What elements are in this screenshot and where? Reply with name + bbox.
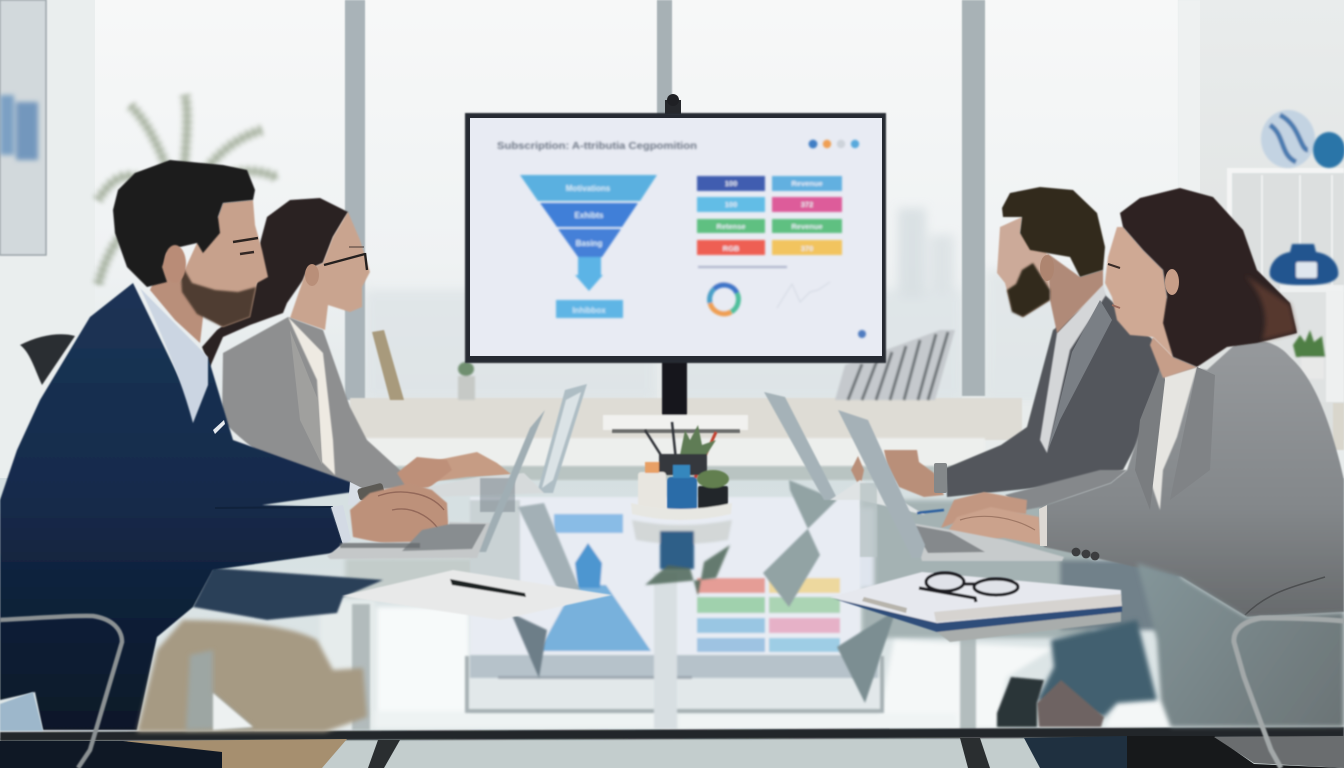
right hand xyxy=(428,452,512,482)
ear xyxy=(1165,269,1179,295)
jacket xyxy=(222,317,412,490)
table front rail xyxy=(0,727,1344,741)
hair highlight xyxy=(1245,275,1296,340)
status dots xyxy=(809,140,859,148)
reflected laptop screens xyxy=(511,480,896,703)
shirt xyxy=(140,288,208,423)
lapel shade xyxy=(1135,362,1165,510)
hands xyxy=(884,450,944,497)
segment grid: Revenue xyxy=(791,179,823,188)
laptop base xyxy=(911,523,1064,561)
centre desk organiser xyxy=(631,422,732,596)
left hand xyxy=(397,457,452,490)
jacket xyxy=(946,293,1167,497)
beard xyxy=(180,262,256,327)
windows xyxy=(95,0,1178,400)
clip xyxy=(862,597,907,613)
water glass right xyxy=(860,483,877,557)
segment grid: Revenue xyxy=(791,222,823,231)
pens and plant in cup xyxy=(645,422,716,478)
window sill and books xyxy=(350,330,1022,440)
tray xyxy=(631,503,732,520)
funnel outcome box: Inhibbox xyxy=(572,306,606,315)
sleeve crease xyxy=(215,507,343,543)
chair: left arm xyxy=(0,616,122,768)
lower left corner window reflection xyxy=(0,692,43,731)
reflected monitor xyxy=(467,497,882,729)
table frame reflections xyxy=(352,604,976,730)
city skyline through window xyxy=(365,208,1175,400)
sleeve buttons xyxy=(1072,548,1099,560)
blouse xyxy=(288,317,335,475)
hair xyxy=(113,160,255,287)
vase: globe xyxy=(1261,110,1315,168)
potted plant behind people xyxy=(98,95,278,285)
faint line chart xyxy=(777,282,830,308)
right wall xyxy=(1200,0,1344,440)
folder reflection xyxy=(937,612,1121,642)
books left xyxy=(372,330,404,400)
funnel arrow xyxy=(575,257,603,291)
ear xyxy=(1040,255,1054,281)
face xyxy=(1105,227,1173,357)
left wall xyxy=(0,0,95,520)
person: woman in grey at back left xyxy=(202,198,512,490)
shirt xyxy=(1150,367,1197,510)
funnel chart: Exhibts xyxy=(575,211,604,220)
shelf with vases xyxy=(1227,110,1344,450)
glasses xyxy=(324,253,367,270)
lapel shade xyxy=(290,330,322,465)
floor below table xyxy=(0,738,1344,768)
reflections of people in the glass xyxy=(123,563,1344,768)
paper sheet xyxy=(342,570,612,620)
jeans below rail xyxy=(1024,736,1127,768)
monitor frame xyxy=(465,113,886,363)
left trousers below rail xyxy=(123,739,347,768)
right clipboard and glasses xyxy=(830,572,1122,642)
shirt cuff xyxy=(1039,505,1047,546)
shirt cuffs xyxy=(331,482,362,545)
hands xyxy=(350,483,449,545)
pocket square xyxy=(213,420,225,434)
finger shading xyxy=(378,492,444,538)
laptop base xyxy=(327,522,490,559)
finger shading xyxy=(960,516,1035,530)
segment grid: 100 xyxy=(725,179,737,188)
face and neck xyxy=(290,212,370,330)
neck xyxy=(1047,253,1103,333)
neck xyxy=(150,255,205,343)
back left laptop xyxy=(429,384,587,512)
funnel outcome box xyxy=(556,300,623,318)
lapel xyxy=(1048,300,1112,450)
wall painting xyxy=(0,0,46,255)
person: woman in grey right xyxy=(941,188,1344,617)
monitor screen xyxy=(470,118,882,356)
near left laptop xyxy=(327,410,545,559)
palm shadow xyxy=(340,543,420,548)
keyboard xyxy=(402,524,486,551)
monitor xyxy=(465,94,886,433)
chair back xyxy=(20,334,75,385)
right reflection: knee xyxy=(1037,680,1104,727)
funnel chart: Motivations xyxy=(566,184,611,193)
white bottle xyxy=(638,462,666,510)
left reflection: window gap xyxy=(213,693,253,730)
tray reflection xyxy=(632,520,732,596)
laptop lid xyxy=(838,410,925,558)
face xyxy=(180,200,268,327)
neck xyxy=(1150,337,1197,378)
segment grid: RGB xyxy=(723,244,740,253)
beard xyxy=(1007,263,1050,317)
hair xyxy=(1002,187,1105,277)
laptop lid xyxy=(478,410,545,552)
black plant pot xyxy=(697,470,729,511)
face xyxy=(997,217,1050,317)
funnel chart xyxy=(520,175,657,257)
upper glass tone xyxy=(345,500,1180,638)
front hand xyxy=(947,507,1041,545)
water glass xyxy=(480,478,515,512)
glass table xyxy=(0,438,1344,768)
tabletop xyxy=(0,478,1344,730)
ear xyxy=(305,264,319,286)
right reflection: teal legs xyxy=(1037,620,1157,717)
pen xyxy=(450,579,526,597)
blue bottle xyxy=(667,465,697,511)
chair: right arm xyxy=(1234,618,1344,768)
person: man in dark suit right xyxy=(851,187,1167,497)
small plant on sill xyxy=(458,362,475,400)
shelf plant xyxy=(1293,330,1325,379)
eye and brow xyxy=(233,238,258,254)
dark area under left rail xyxy=(0,741,222,768)
books right xyxy=(835,330,955,400)
person: man in navy blazer xyxy=(0,160,449,730)
screen content xyxy=(497,140,866,338)
reflected funnel xyxy=(539,585,651,651)
shirt xyxy=(1040,285,1106,453)
settings dot xyxy=(858,330,866,338)
reflected screen title xyxy=(498,676,692,679)
right reflection: jacket xyxy=(1137,563,1344,727)
hair xyxy=(1120,188,1297,367)
legend line xyxy=(698,266,787,268)
near right laptop xyxy=(838,410,1064,561)
back right laptop xyxy=(764,392,944,557)
right reflection: dark hair xyxy=(997,677,1044,727)
jacket below rail xyxy=(1214,736,1344,768)
folder stack xyxy=(830,572,1122,626)
reflected grid xyxy=(697,578,840,652)
left papers and pen xyxy=(342,570,612,620)
jacket xyxy=(1041,340,1344,617)
segment grid: Retense xyxy=(716,222,746,231)
window mullions xyxy=(345,0,1202,400)
screen title: Subscription: A-ttributia Cegpomition xyxy=(497,141,697,152)
segment grid xyxy=(697,176,842,255)
jacket xyxy=(0,283,353,730)
shelf frame xyxy=(1227,168,1344,450)
monitor camera xyxy=(665,94,681,114)
monitor stand xyxy=(603,360,748,433)
watch xyxy=(357,483,385,501)
glasses xyxy=(919,573,1018,602)
ear xyxy=(164,245,186,283)
hair xyxy=(202,198,348,367)
pocket seam xyxy=(1245,577,1325,615)
blue pen xyxy=(917,510,944,513)
reflected table post xyxy=(654,573,677,729)
segment grid: 372 xyxy=(801,200,813,209)
left reflection: pale ghost xyxy=(186,650,253,730)
reflection of jacket xyxy=(193,568,383,620)
table legs xyxy=(368,738,990,768)
vase: teal xyxy=(1313,132,1344,168)
funnel chart: Basing xyxy=(576,239,602,248)
bright reflected window xyxy=(320,600,1171,730)
watch xyxy=(934,463,947,493)
keyboard xyxy=(912,525,985,553)
eyebrow xyxy=(349,246,364,248)
back hand xyxy=(941,492,1027,528)
eye and mouth xyxy=(1108,264,1120,308)
vase: navy xyxy=(1270,244,1338,285)
segment grid: 370 xyxy=(801,244,813,253)
back sleeve xyxy=(1005,470,1127,510)
donut chart xyxy=(710,284,738,314)
segment grid: 100 xyxy=(725,200,737,209)
black seat below rail xyxy=(1127,736,1344,768)
left reflection: trousers xyxy=(137,620,367,732)
